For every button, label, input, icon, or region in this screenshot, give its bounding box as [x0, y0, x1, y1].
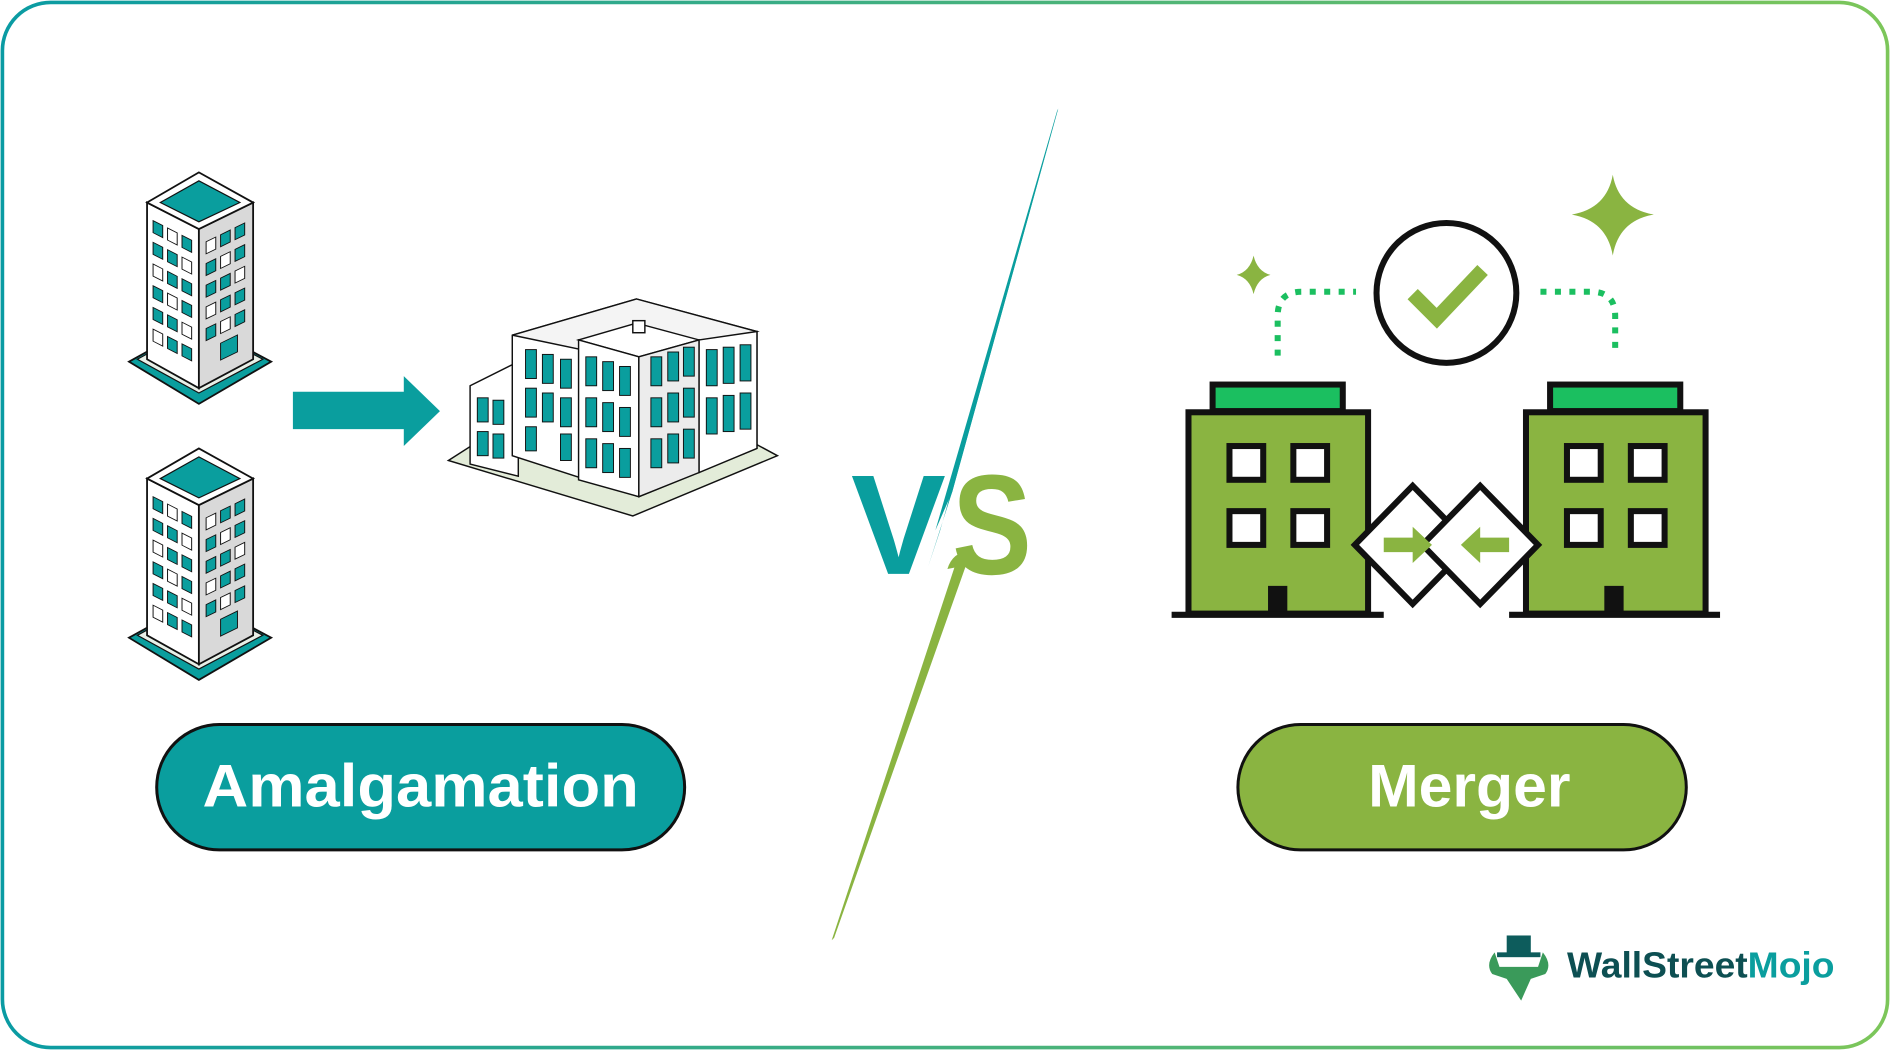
- icon: tower top: [129, 172, 271, 404]
- icon: sparkles: [1237, 175, 1654, 294]
- icon: merged large building: [448, 299, 777, 516]
- pill: Merger: [1238, 725, 1686, 850]
- icon: merger buildings: [1172, 385, 1720, 615]
- VS text: S: [952, 446, 1032, 605]
- pill: Amalgamation: Amalgamation: [203, 751, 639, 819]
- logo: [1489, 935, 1835, 1001]
- VS text: [851, 446, 1032, 605]
- pill: Merger: Merger: [1368, 751, 1571, 819]
- icon: check circle: [1377, 223, 1516, 363]
- dotted connectors: [1278, 292, 1615, 356]
- arrow: [293, 376, 440, 446]
- VS text: V: [851, 446, 946, 605]
- icon: tower bottom: [129, 448, 271, 680]
- divider slash: [832, 108, 1058, 940]
- pill: Amalgamation: [157, 725, 685, 850]
- logo: WallStreetMojo: [1567, 945, 1835, 986]
